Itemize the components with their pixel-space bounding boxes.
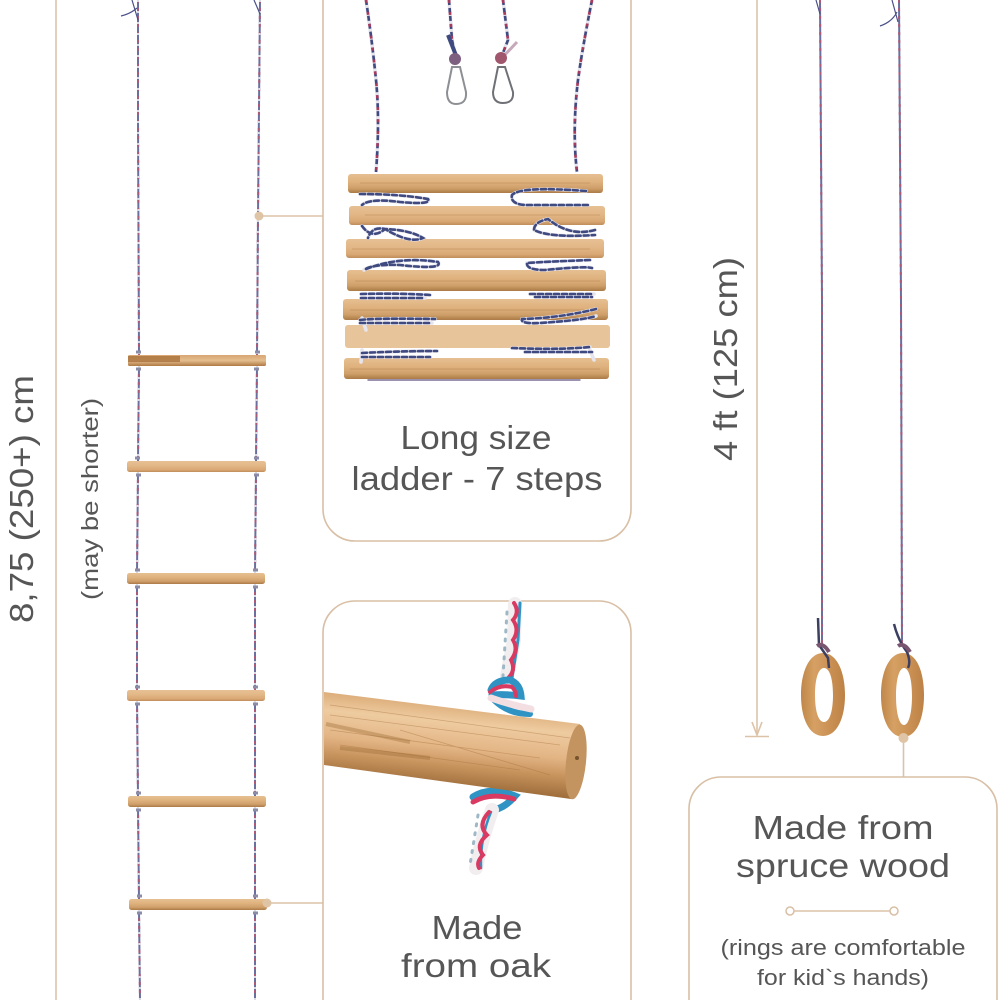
gymnastic rings (801, 0, 924, 737)
panel: made from oak (323, 601, 631, 1000)
panel: made from oak: from oak (401, 947, 552, 984)
panel frame (323, 0, 631, 541)
dimension line: ladder height (55, 0, 57, 1000)
oak rung close-up (324, 692, 590, 800)
note: (rings are comfortable (720, 935, 966, 960)
panel: made from spruce wood: for kid`s hands) (757, 965, 929, 990)
divider (786, 907, 898, 915)
long ropes and carabiners (366, 0, 592, 172)
dimension label: ladder height: 8,75 (250+) cm (3, 375, 40, 623)
note: may be shorter: (may be shorter) (77, 398, 103, 600)
heading: Made from (752, 809, 934, 846)
panel: made from spruce wood (689, 777, 997, 1000)
panel: long size ladder: ladder - 7 steps (352, 460, 602, 497)
right ring (881, 653, 924, 737)
panel frame (689, 777, 997, 1000)
panel: long size ladder (323, 0, 631, 541)
caption: Long size (400, 419, 552, 456)
left ring (801, 653, 845, 736)
rope close-up above rung (490, 603, 531, 714)
caption: Made (432, 909, 522, 946)
connector: ladder rope to size panel (254, 212, 323, 220)
connector: ladder rung to oak panel (262, 898, 323, 908)
ring ropes (816, 0, 902, 645)
dimension line: ring strap length (745, 0, 769, 736)
folded ladder rungs (343, 174, 610, 379)
dimension label: ring strap length: 4 ft (125 cm) (707, 257, 744, 461)
panel frame (323, 601, 631, 1000)
ring knots (817, 618, 910, 668)
rope close-up below rung (470, 791, 515, 868)
ladder rungs (127, 355, 267, 910)
rope ladder (121, 0, 267, 1000)
rope loops (360, 189, 596, 380)
ladder ropes (121, 0, 260, 1000)
panel: made from spruce wood: spruce wood (736, 847, 950, 884)
connector: ring to spruce panel (898, 733, 908, 777)
